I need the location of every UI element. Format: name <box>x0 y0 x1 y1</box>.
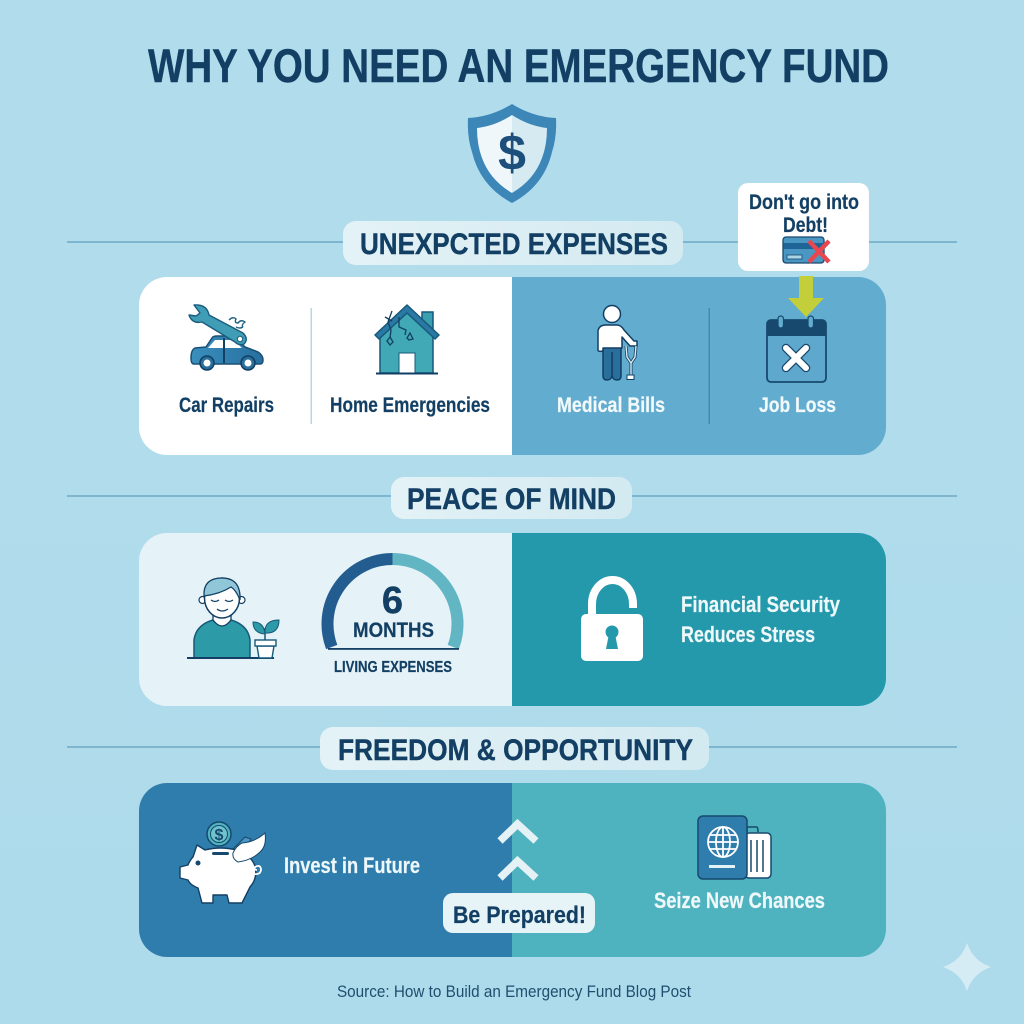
section rule: peace of mind <box>67 495 957 497</box>
label: job loss: Job Loss <box>759 394 836 417</box>
text: financial security reduces stress: Financial Security <box>681 592 841 617</box>
icon: damaged house <box>375 305 439 374</box>
heading: unexpected expenses <box>343 221 683 265</box>
arrow: debt callout to job loss <box>788 276 824 317</box>
icon: car and wrench <box>189 305 263 370</box>
icon: flying piggy bank <box>180 822 265 903</box>
label: home emergencies: Home Emergencies <box>330 394 490 417</box>
text: financial security reduces stress <box>681 592 841 647</box>
chart: six months gauge <box>327 559 459 676</box>
icon: shield with dollar <box>468 104 556 203</box>
label: seize new chances: Seize New Chances <box>654 888 825 913</box>
callout: don't go into debt: Debt! <box>783 214 828 237</box>
icon: passport and suitcase <box>698 816 771 879</box>
panel: peace of mind <box>139 533 886 706</box>
callout: be prepared: Be Prepared! <box>453 902 586 929</box>
icon: calendar with cross <box>767 316 826 382</box>
icon: sparkle <box>943 943 991 991</box>
text: financial security reduces stress: Reduces Stress <box>681 622 815 647</box>
heading: unexpected expenses: UNEXPCTED EXPENSES <box>360 228 668 261</box>
callout: be prepared <box>443 893 595 933</box>
chart: six months gauge: LIVING EXPENSES <box>334 659 452 676</box>
icon: shield with dollar: $ <box>498 125 526 181</box>
section rule: unexpected expenses <box>67 241 957 243</box>
section rule: freedom and opportunity <box>67 746 957 748</box>
source note: Source: How to Build an Emergency Fund Blog Post <box>337 982 691 1001</box>
label: car repairs: Car Repairs <box>179 394 274 417</box>
heading: freedom and opportunity <box>320 727 709 770</box>
icon: upward chevrons <box>500 824 536 878</box>
label: medical bills: Medical Bills <box>557 394 665 417</box>
panel: unexpected expenses <box>139 277 886 455</box>
icon: crossed credit card <box>783 237 829 263</box>
icon: flying piggy bank: $ <box>215 827 224 844</box>
callout: don't go into debt <box>738 183 869 271</box>
label: invest in future: Invest in Future <box>284 853 420 878</box>
callout: don't go into debt: Don't go into <box>749 191 859 214</box>
icon: open padlock <box>581 580 643 661</box>
heading: peace of mind: PEACE OF MIND <box>407 483 616 516</box>
heading: freedom and opportunity: FREEDOM & OPPORTUNITY <box>338 734 693 767</box>
chart: six months gauge: 6 <box>382 580 403 622</box>
icon: person with crutch <box>598 306 637 380</box>
panel: freedom and opportunity <box>139 783 886 957</box>
icon: calm person with plant <box>187 578 279 659</box>
chart: six months gauge: MONTHS <box>353 619 434 642</box>
